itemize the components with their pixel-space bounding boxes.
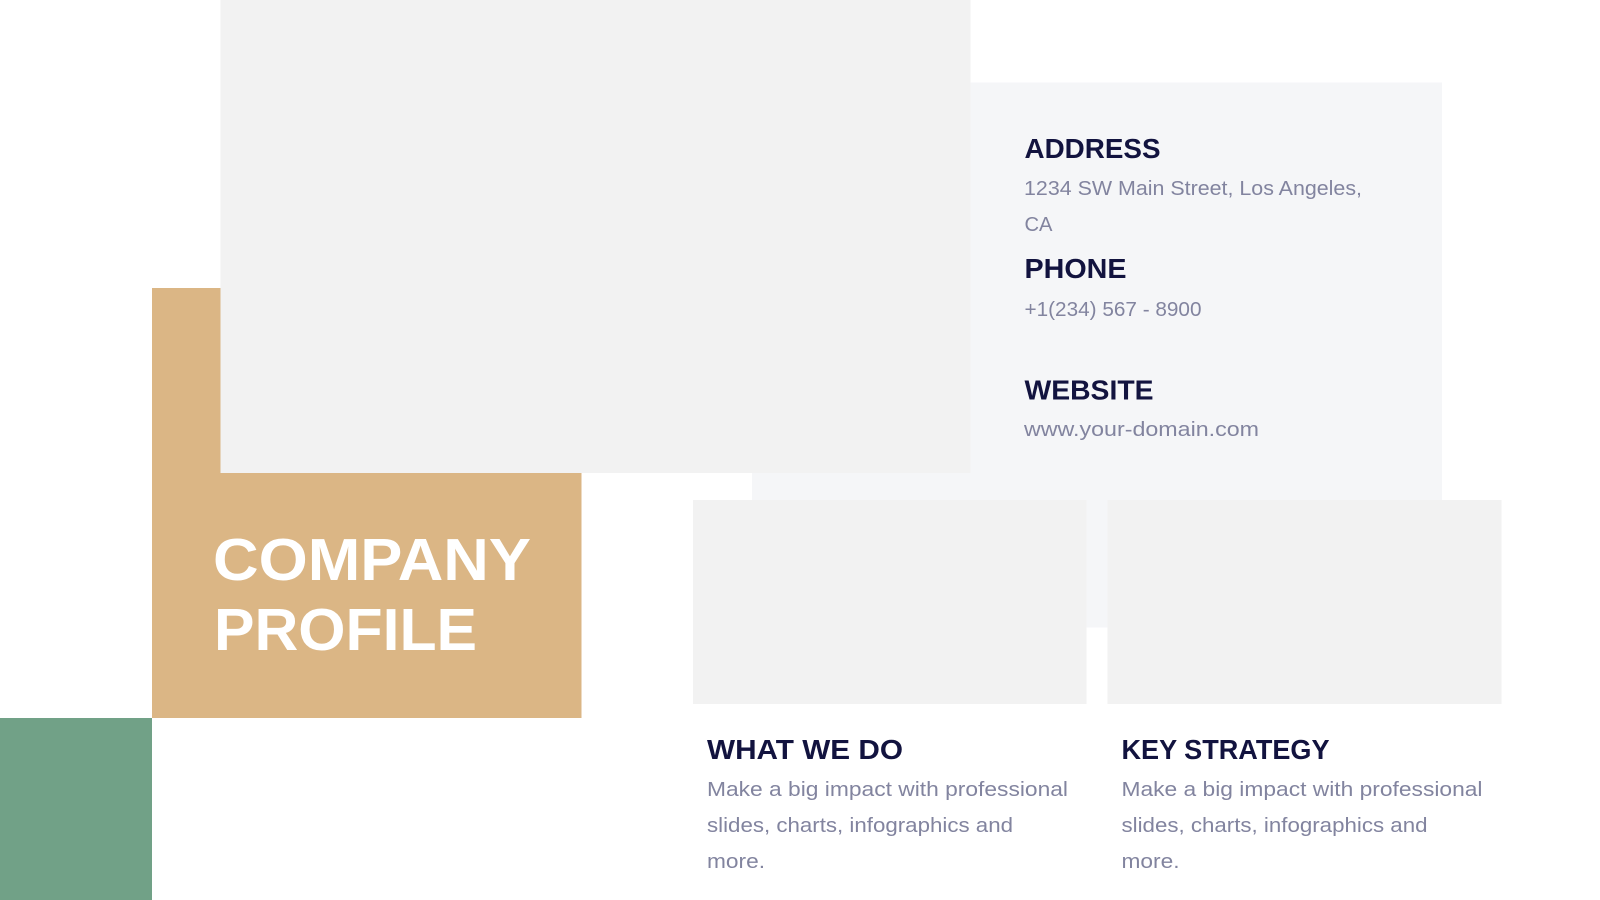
text block: key strategy [1122, 734, 1482, 873]
text block: what we do: more. [707, 850, 765, 873]
contact: website [1023, 374, 1259, 441]
contact: phone: +1(234) 567 - 8900 [1024, 298, 1202, 321]
title: PROFILE [214, 597, 477, 663]
contact: address: 1234 SW Main Street, Los Angeles, [1024, 177, 1362, 200]
text block: what we do: slides, charts, infographics and [707, 814, 1013, 837]
contact: phone [1024, 253, 1202, 321]
image placeholder: key strategy [1108, 500, 1502, 704]
title [213, 527, 531, 663]
text block: what we do [707, 734, 1068, 873]
panel: green square [0, 718, 152, 900]
panel: gold title block [152, 288, 582, 718]
contact: address [1024, 133, 1362, 236]
image placeholder: what we do [693, 500, 1086, 704]
text block: key strategy: more. [1122, 850, 1180, 873]
text block: what we do: Make a big impact with professional [707, 778, 1068, 801]
title: COMPANY [213, 527, 531, 593]
contact: website: WEBSITE [1024, 374, 1154, 406]
contact: website: www.your-domain.com [1023, 418, 1259, 441]
image placeholder: main [220, 0, 970, 473]
panel: contact background [752, 82, 1442, 628]
text block: key strategy: Make a big impact with professional [1122, 778, 1482, 801]
text block: key strategy: KEY STRATEGY [1122, 734, 1330, 765]
contact: address: ADDRESS [1024, 133, 1160, 164]
contact: address: CA [1024, 213, 1053, 236]
text block: what we do: WHAT WE DO [707, 734, 903, 765]
text block: key strategy: slides, charts, infographics and [1122, 814, 1428, 837]
contact: phone: PHONE [1024, 253, 1126, 284]
